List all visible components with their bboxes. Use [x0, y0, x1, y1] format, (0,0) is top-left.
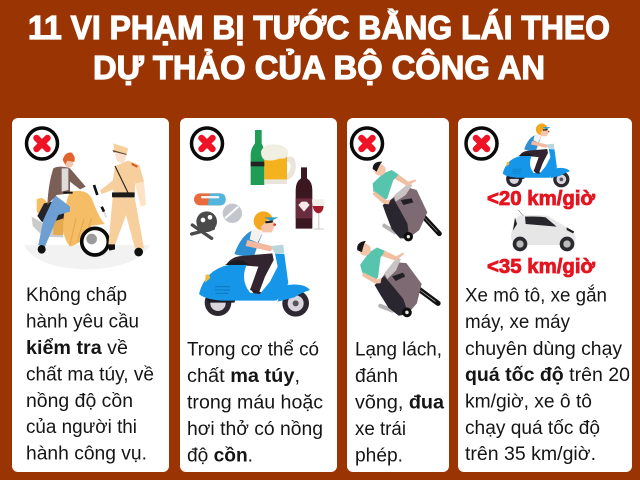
title	[28, 9, 610, 86]
speed limit: car: <35 km/giờ	[487, 256, 596, 278]
text block	[26, 285, 154, 464]
text block	[187, 340, 323, 466]
text block: hành yêu cầu	[26, 312, 139, 332]
icon: beer bottle	[251, 130, 264, 185]
text block	[465, 284, 630, 465]
text block: hơi thở có nồng	[187, 419, 323, 440]
icon: red cross	[192, 128, 222, 159]
text block: Không chấp	[26, 285, 127, 306]
text block: km/giờ, xe ô tô	[465, 392, 592, 412]
text block: hành công vụ.	[26, 444, 147, 464]
text block	[355, 340, 444, 466]
icon: red cross	[26, 128, 58, 159]
text block: võng, đua	[355, 392, 444, 414]
text block: chất ma túy, về	[26, 364, 154, 386]
illustration: white car	[511, 210, 576, 251]
icon: beer mug	[261, 144, 296, 184]
illustration: drinks, drugs and scooter rider	[192, 130, 324, 317]
text block: Xe mô tô, xe gắn	[465, 284, 607, 306]
text block: đánh	[355, 366, 398, 387]
icon: skull and crossbones	[192, 211, 217, 238]
title: 11 VI PHẠM BỊ TƯỚC BẰNG LÁI THEO	[28, 9, 610, 46]
text block: độ cồn.	[187, 446, 253, 466]
speed limit: motorbike: <20 km/giờ	[487, 188, 596, 210]
icon: capsule	[194, 193, 226, 205]
text block: trên 35 km/giờ.	[465, 444, 596, 465]
panel: speeding	[458, 118, 632, 472]
text block: nồng độ cồn	[26, 391, 133, 412]
icon: red cross	[466, 128, 497, 159]
icon: wine bottle and glass	[296, 167, 324, 230]
text block: của người thi	[26, 417, 137, 438]
text block: xe trái	[355, 419, 406, 440]
text block: chạy quá tốc độ	[465, 418, 600, 439]
text block: máy, xe máy	[465, 312, 570, 333]
text block: trong máu hoặc	[187, 392, 323, 414]
text block: phép.	[355, 446, 403, 466]
text block: kiểm tra về	[26, 338, 128, 359]
text block: Trong cơ thể có	[187, 340, 319, 360]
text block: Lạng lách,	[355, 340, 442, 360]
text block: quá tốc độ trên 20	[465, 365, 630, 386]
illustration: scooter rider	[199, 211, 310, 317]
panel: drugs and alcohol	[180, 118, 337, 472]
illustration: police stopping a motorbike rider	[24, 143, 150, 269]
icon: red cross	[352, 128, 382, 159]
illustration: two leaning motorbike riders	[356, 162, 440, 324]
illustration: small scooter rider	[503, 123, 570, 187]
icon: pill	[223, 204, 242, 223]
title: DỰ THẢO CỦA BỘ CÔNG AN	[93, 48, 545, 86]
panel: weaving and racing	[347, 118, 449, 472]
text block: chất ma túy,	[187, 366, 300, 387]
text block: chuyên dùng chạy	[465, 339, 623, 360]
panel: refusing inspection	[12, 118, 169, 472]
